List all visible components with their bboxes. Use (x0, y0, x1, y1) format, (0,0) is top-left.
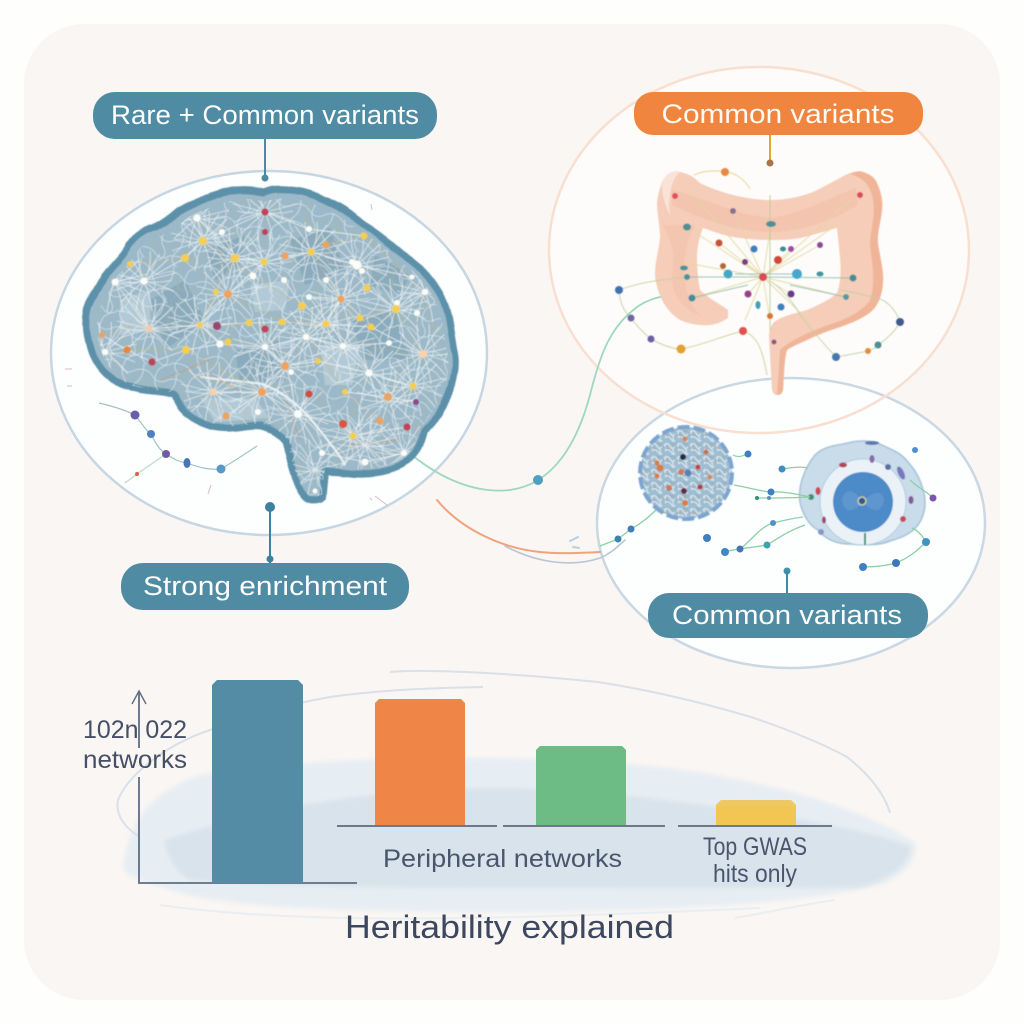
icon: colon (615, 168, 904, 395)
panel: gut circle (549, 67, 969, 433)
bar: core networks (212, 680, 303, 883)
colon nodes (615, 168, 904, 361)
icon: nerve cell ball (640, 427, 732, 519)
brain nodes (99, 208, 428, 494)
bar: peripheral orange (375, 699, 465, 825)
chart axes (132, 691, 357, 883)
panel: immune cells circle (549, 67, 985, 668)
icon: immune cell with nucleus (800, 441, 925, 545)
pill: Common variants orange: Common variants (662, 99, 894, 129)
bar: peripheral green (536, 746, 626, 825)
bar: top GWAS hits (716, 800, 796, 825)
pill: Rare + Common variants: Rare + Common variants (111, 100, 419, 130)
y axis label (83, 716, 187, 774)
pill: Common variants blue (648, 568, 928, 638)
label: Top GWAS hits only: Top GWAS (703, 833, 807, 861)
chart title: Heritability explained (345, 909, 674, 945)
label: Top GWAS hits only (703, 833, 807, 888)
chart background wash (123, 758, 915, 919)
baselines (337, 825, 832, 827)
colon body (655, 171, 883, 395)
bar chart: heritability (132, 680, 832, 883)
icon: brain network (73, 182, 465, 510)
chart outline arcs (117, 671, 890, 837)
pill: Rare + Common variants (93, 92, 437, 182)
y axis label: networks (83, 746, 187, 774)
pill: Common variants blue: Common variants (672, 600, 902, 630)
connector curves between organs (412, 293, 690, 563)
pill: Strong enrichment: Strong enrichment (143, 571, 388, 601)
brain interior network (96, 198, 448, 496)
label: Top GWAS hits only: hits only (713, 860, 797, 888)
y axis label: 102n 022 (83, 716, 187, 744)
colon network lines (619, 171, 900, 375)
brain silhouette (86, 190, 455, 501)
panel: brain circle (51, 171, 487, 535)
variant links and nodes, right panel (600, 447, 936, 571)
pill: Strong enrichment (121, 502, 409, 610)
icon: small variant chain left (65, 204, 387, 505)
pill: Common variants orange (634, 92, 923, 166)
label: Peripheral networks: Peripheral networks (383, 845, 622, 873)
